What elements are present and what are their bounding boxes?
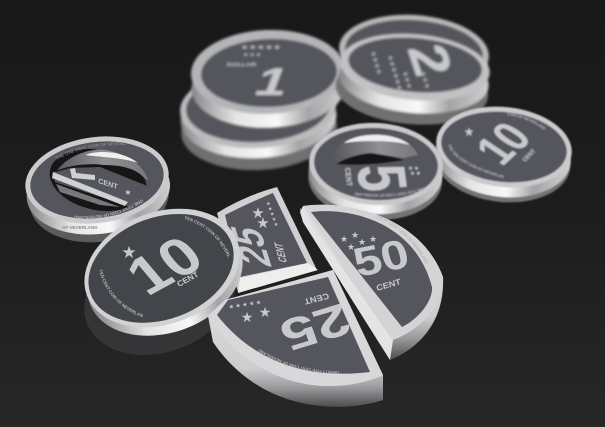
coin: 1 dollar, top of stack bbox=[190, 27, 347, 131]
half coin: 50 cent: ★ bbox=[351, 230, 359, 240]
numeral 25: 25 bbox=[220, 222, 282, 270]
quarter coin: 25 cent lower bbox=[208, 270, 383, 407]
stars: ★ bbox=[340, 234, 348, 244]
numeral 25: 25 bbox=[272, 294, 358, 360]
rim legend: THE FIVE CENT COIN OF NEVERLAND bbox=[354, 186, 424, 198]
rim legends: THE TEN CENT COIN OF NEVERLAND bbox=[448, 144, 504, 179]
slot opening bbox=[333, 134, 418, 165]
stars rows: ★★★★★ bbox=[241, 45, 282, 51]
big stars: ★ bbox=[251, 205, 265, 222]
coin: 10 cent right: COIN OF NEVERLAND bbox=[506, 112, 546, 130]
coin: 5 cent with slot bbox=[308, 122, 444, 220]
slot highlight bbox=[344, 135, 410, 145]
label cent: CENT bbox=[375, 277, 402, 293]
label cent: CENT bbox=[302, 291, 330, 307]
rim legend upper: TEN CENT COIN OF NEVERLAND bbox=[184, 216, 230, 258]
rim legend: FIFTY CENT COIN OF NEVERLAND bbox=[378, 216, 428, 264]
coin: 2 dollars, top bbox=[335, 28, 493, 130]
coin: 5 cent with slot: ★★ bbox=[410, 171, 422, 177]
star: ★ bbox=[124, 188, 132, 197]
half coin: 50 cent: ★ bbox=[347, 242, 355, 252]
coin: 2 dollars, top: ★★★★★★ bbox=[386, 55, 403, 92]
coin: 2 dollars, top: ★★★ bbox=[401, 71, 413, 90]
small stars: ★★★★★ bbox=[264, 201, 279, 229]
numeral 2: 2 bbox=[396, 39, 464, 81]
star: ★ bbox=[121, 243, 137, 262]
hole opening bbox=[44, 140, 152, 220]
half coin: 50 cent: ★ bbox=[369, 234, 377, 244]
hole upper wall bbox=[52, 150, 148, 183]
coin: 1 dollar, top of stack: ★★★ bbox=[243, 53, 262, 58]
numeral 50: 50 bbox=[348, 230, 414, 286]
coin stack: 2 dollars lower bbox=[333, 10, 492, 128]
quarter coin: 25 cent upper: ★ bbox=[256, 215, 270, 232]
star columns: ★★★★ bbox=[369, 51, 383, 76]
coin: 10 cent large bbox=[84, 208, 243, 355]
edge legend: OF NEVERLAND bbox=[62, 225, 98, 230]
stars: ★★ bbox=[408, 166, 420, 172]
quarter coin: 25 cent upper bbox=[217, 187, 318, 293]
quarter coin: 25 cent lower: ★ bbox=[259, 304, 271, 320]
label cent: CENT bbox=[98, 176, 119, 191]
half coin: 50 cent bbox=[300, 204, 444, 360]
star: ★ bbox=[464, 125, 474, 139]
label cent: CENT bbox=[175, 270, 200, 289]
coin reflection bbox=[68, 217, 252, 375]
numeral 10: 10 bbox=[465, 114, 543, 173]
label cent: CENT bbox=[343, 167, 353, 187]
lower wall bbox=[56, 184, 120, 207]
numeral 5: 5 bbox=[342, 162, 421, 194]
numeral 1: 1 bbox=[249, 60, 296, 104]
label cent: CENT bbox=[273, 242, 291, 264]
coin stack: lower coin bbox=[178, 64, 339, 174]
label dollar: DOLLAR bbox=[227, 63, 257, 68]
coin: 10 cent right bbox=[435, 106, 573, 204]
rim legend: TWENTY FIVE CENT COIN OF NEVERLAND bbox=[258, 350, 340, 374]
numeral 10: 10 bbox=[114, 224, 215, 307]
slot dark gap bbox=[336, 153, 404, 165]
small stars: ★★★★★ bbox=[228, 299, 263, 311]
big stars: ★ bbox=[241, 309, 253, 325]
coin: 1 cent ring bbox=[25, 136, 170, 242]
wall highlight bbox=[85, 152, 138, 163]
rim legend lower: TEN CENT COIN OF NEVERLAND bbox=[99, 269, 144, 318]
light numeral stem bbox=[52, 172, 128, 206]
half coin: 50 cent: ★ bbox=[358, 237, 366, 247]
rim legend lower: ONE CENT COIN OF NEVERLAND bbox=[74, 200, 143, 219]
central bar bbox=[53, 167, 152, 206]
coin: 2 dollars, top: ★★★ bbox=[419, 71, 431, 90]
numeral flag bbox=[70, 168, 95, 180]
label cent: CENT bbox=[522, 148, 538, 163]
